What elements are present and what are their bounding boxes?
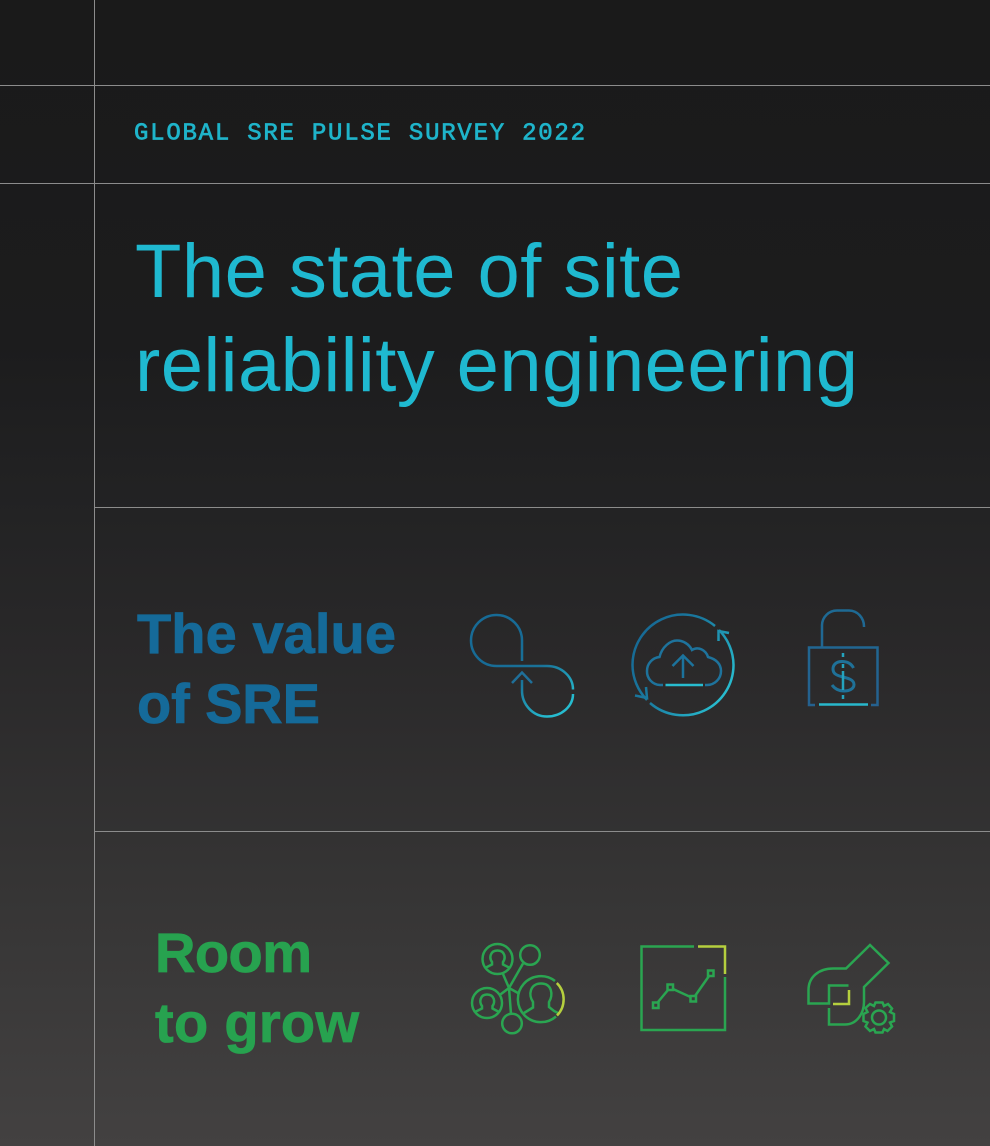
heading: room to grow: to grow [155, 991, 359, 1054]
title: reliability engineering [135, 323, 858, 408]
panel: room to grow [155, 921, 894, 1054]
icon: infinity loop arrow [471, 615, 573, 716]
heading: the value of SRE [137, 602, 396, 735]
panel: the value of SRE [137, 602, 878, 735]
heading: the value of SRE: The value [137, 602, 396, 665]
icon: wrench and gear [808, 945, 894, 1032]
heading: room to grow: Room [155, 921, 312, 984]
heading: room to grow [155, 921, 359, 1054]
eyebrow label: GLOBAL SRE PULSE SURVEY 2022 [134, 120, 585, 148]
icon: open padlock with dollar [809, 610, 878, 705]
heading: the value of SRE: of SRE [137, 672, 320, 735]
icon: people network [472, 944, 564, 1033]
icon: cloud upload cycle [632, 615, 734, 715]
title: The state of site [135, 229, 683, 314]
icon: growth chart [642, 946, 725, 1030]
title [135, 229, 858, 408]
